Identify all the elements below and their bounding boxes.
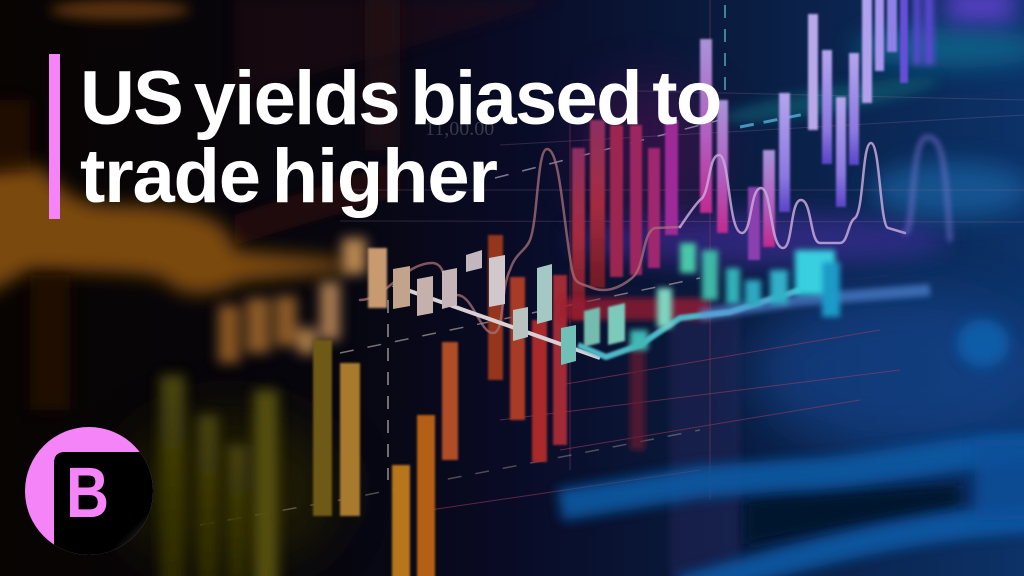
title: [80, 56, 721, 219]
pale candlesticks: [368, 248, 625, 365]
lower orange candles: [313, 340, 458, 576]
oscillator line: [360, 137, 950, 333]
blurred left candles (orange and olive): [0, 0, 400, 576]
blurred cyan candles: [630, 243, 840, 350]
title: trade higher: [80, 134, 497, 219]
blue ribbons: [560, 440, 1024, 576]
logo: Bloomberg B roundel: [25, 427, 153, 555]
title: US yields biased to: [80, 56, 721, 141]
white to cyan trend line: [393, 285, 930, 358]
faint scale label: 11,00.00: [425, 118, 494, 140]
grid lines: [200, 0, 1024, 525]
upper purple candles: [700, 0, 1015, 260]
red and magenta candles: [488, 120, 710, 462]
logo: Bloomberg B roundel: B: [66, 453, 109, 532]
title accent bar: [49, 54, 60, 219]
